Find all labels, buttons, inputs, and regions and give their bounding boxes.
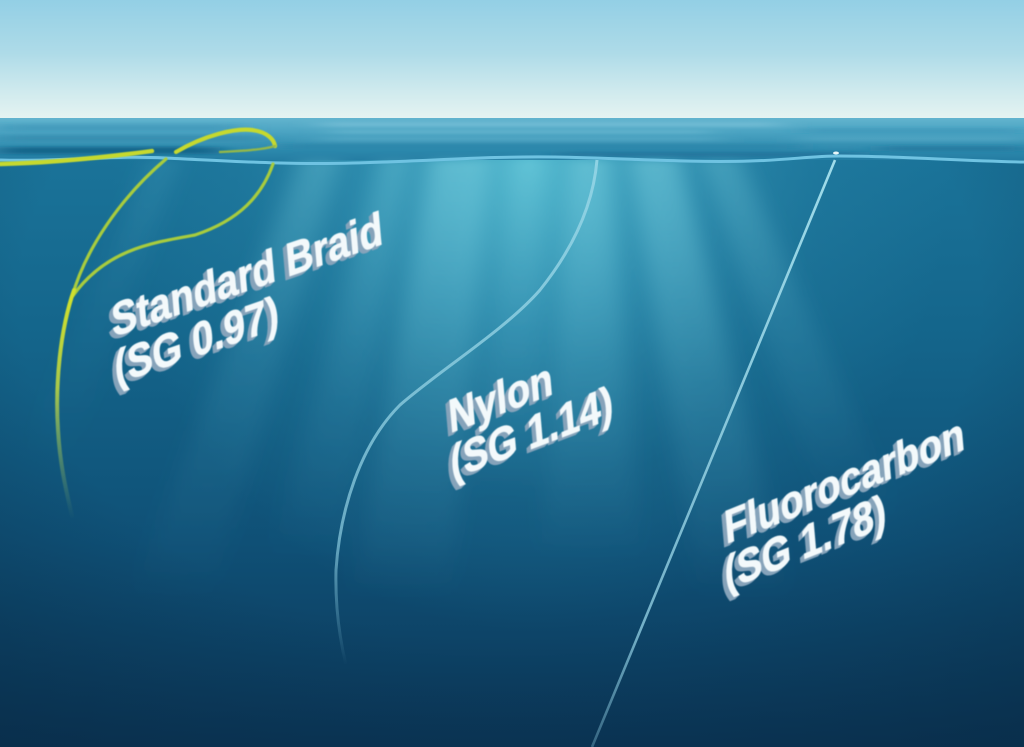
nylon line (slowly sinking, curved): [336, 160, 597, 665]
label: standard braid: Standard Braid: [109, 203, 385, 348]
fluorocarbon line (straight, fast sinking): [592, 160, 835, 747]
label: nylon: (SG 1.14): [448, 377, 615, 490]
braid: second sinking strand: [72, 164, 273, 297]
label: standard braid: (SG 0.97): [112, 287, 281, 395]
label: fluorocarbon: Fluorocarbon: [722, 408, 967, 555]
braid: reflection of the loop: [220, 146, 275, 152]
sky: [0, 0, 1024, 118]
braid: tail fading into the depth: [57, 290, 74, 516]
underwater body: [0, 160, 1024, 747]
braid: first sinking strand: [72, 159, 166, 297]
corner vignette: [0, 160, 1024, 747]
label: nylon: Nylon: [446, 353, 555, 444]
small float mark at fluorocarbon entry: [833, 152, 839, 154]
central glow under the surface: [0, 160, 1024, 747]
light rays: [20, 160, 900, 600]
label: fluorocarbon: (SG 1.78): [722, 485, 888, 601]
sea surface seen from above: [0, 118, 1024, 166]
water surface line: [0, 156, 1024, 164]
braid: floating section at left: [0, 151, 152, 164]
standard braid line (floating, yellow-green): [0, 130, 275, 516]
braid: loop above the surface: [176, 130, 275, 152]
